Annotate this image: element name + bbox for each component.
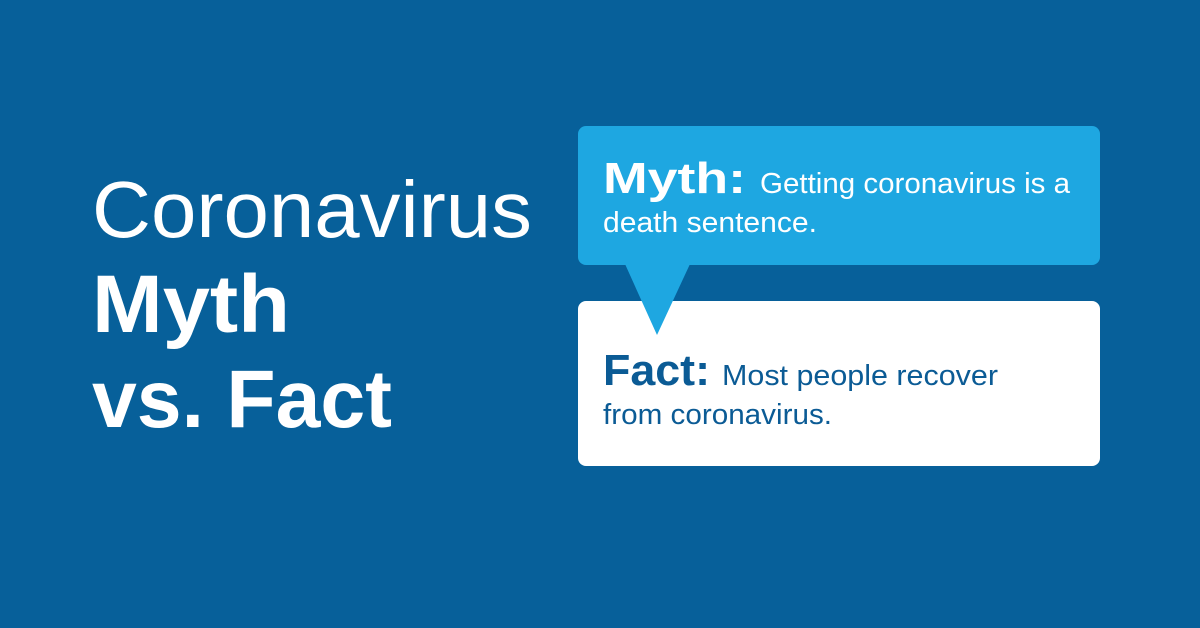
title xyxy=(92,165,532,445)
panel: fact: Most people recover xyxy=(722,360,998,392)
panel: fact xyxy=(578,301,1100,466)
title: vs. Fact xyxy=(92,354,392,445)
panel: myth speech bubble xyxy=(578,126,1100,335)
panel: fact: Fact: xyxy=(603,346,710,395)
panel: myth speech bubble: Myth: xyxy=(603,154,746,203)
panel: myth speech bubble: death sentence. xyxy=(603,207,817,239)
panel: fact: from coronavirus. xyxy=(603,399,832,431)
panel: myth speech bubble: Getting coronavirus is a xyxy=(760,168,1071,200)
title: Myth xyxy=(92,259,290,350)
title: Coronavirus xyxy=(92,165,532,254)
